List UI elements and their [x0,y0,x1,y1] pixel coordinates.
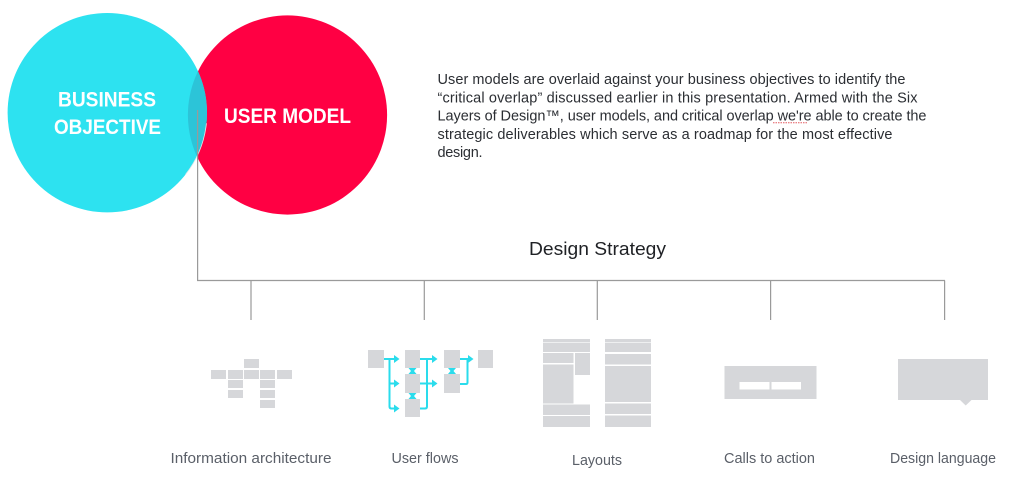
description text [438,72,926,161]
label: information architecture: Information architecture [170,451,332,467]
icon: calls to action [724,366,816,399]
label: user flows: User flows [392,451,458,467]
overlap edge [0,0,247,252]
label: business objective: BUSINESS [58,88,156,112]
description text: Layers of Design™, user models, and critical overlap we're able to create the [438,109,926,125]
circle: business objective [8,13,207,212]
circle: user model [188,15,387,215]
icon: information architecture [211,359,292,408]
icon: user flows [368,350,493,417]
icon: design language [898,359,988,406]
heading: design strategy: Design Strategy [529,238,667,259]
label: design language: Design language [890,451,996,467]
connector tree [198,110,945,320]
description text: design. [438,145,482,161]
critical overlap [188,72,207,156]
label: layouts: Layouts [572,453,622,469]
description text: strategic deliverables which serve as a roadmap for the most effective [438,127,892,143]
icon: layouts [543,339,651,427]
label: objective line: OBJECTIVE [54,116,161,139]
label: calls to action: Calls to action [724,451,815,467]
venn diagram [8,13,388,215]
description text: User models are overlaid against your business objectives to identify the [438,72,906,88]
description text: “critical overlap” discussed earlier in this presentation. Armed with the Six [438,90,918,106]
label: user model: USER MODEL [224,105,351,128]
